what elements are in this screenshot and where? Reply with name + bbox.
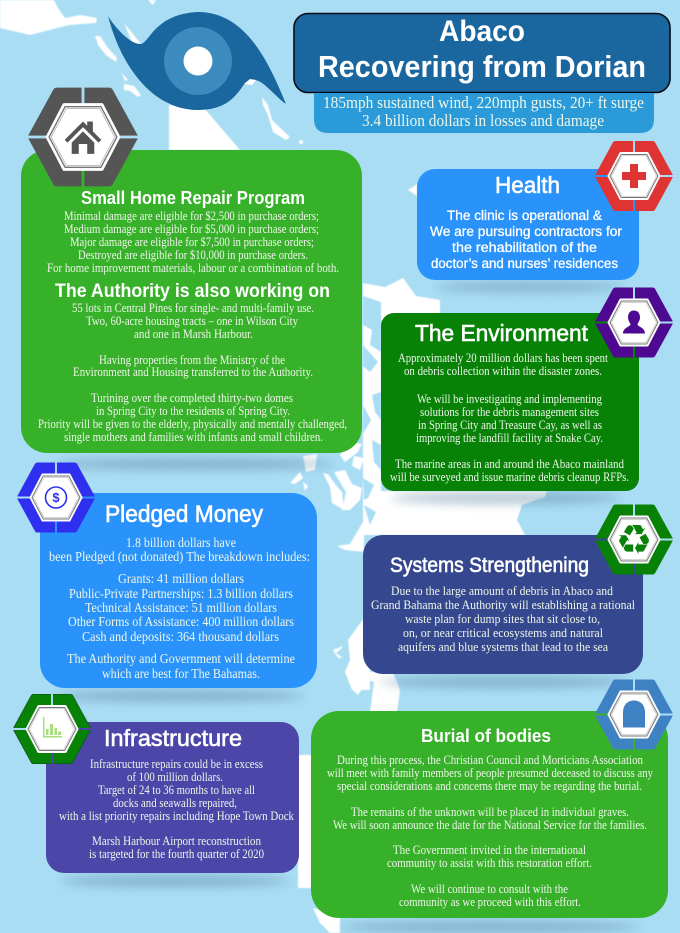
heading: the environment: The Environment <box>415 320 589 346</box>
icon: medical cross badge <box>598 144 670 208</box>
heading: small home repair program: Small Home Repair Program <box>81 188 305 208</box>
text block: burial: special considerations and concerns there may be regarding the burial. <box>337 779 642 793</box>
subtitle banner: 3.4 billion dollars in losses and damage <box>362 111 604 130</box>
text block: authority work <box>38 301 347 444</box>
panel: pledged money <box>40 493 317 688</box>
icon: recycling badge <box>598 508 670 572</box>
text block: burial: community as we proceed with this effort. <box>399 895 581 909</box>
text block: authority work: Priority will be given to the elderly, physically and mentally challenged, <box>38 417 347 431</box>
text block: environment: We will be investigating and implementing <box>417 392 602 406</box>
text block: pledged breakdown: Grants: 41 million dollars <box>118 571 244 586</box>
text block: pledged breakdown: been Pledged (not donated) The breakdown includes: <box>49 549 310 564</box>
text block: systems: aquifers and blue systems that lead to the sea <box>398 640 608 654</box>
text block: repair amounts: Destroyed are eligible for $10,000 in purchase orders. <box>78 248 308 262</box>
text block: pledged breakdown: The Authority and Government will determine <box>67 651 295 666</box>
subtitle banner: 185mph sustained wind, 220mph gusts, 20+ ft surge <box>323 93 644 112</box>
heading: pledged money: Pledged Money <box>105 501 263 528</box>
text block: systems <box>371 584 635 654</box>
text block: pledged breakdown: 1.8 billion dollars have <box>126 535 236 550</box>
text block: infrastructure: docks and seawalls repaired, <box>113 796 237 810</box>
text block: burial: The remains of the unknown will be placed in individual graves. <box>351 805 629 819</box>
title banner <box>294 14 670 92</box>
text block: health: We are pursuing contractors for <box>430 224 623 239</box>
text block: authority work: and one in Marsh Harbour. <box>134 327 253 341</box>
text block: burial: community to assist with this restoration effort. <box>387 856 592 870</box>
heading: infrastructure: Infrastructure <box>104 725 242 751</box>
text block: pledged breakdown: Other Forms of Assistance: 400 million dollars <box>68 614 294 629</box>
text block: environment: will be surveyed and issue marine debris cleanup RFPs. <box>390 470 629 484</box>
text block: health <box>430 208 623 271</box>
heading: health: Health <box>495 172 560 198</box>
text block: infrastructure: Marsh Harbour Airport reconstruction <box>92 834 261 848</box>
text block: environment: on debris collection within the disaster zones. <box>404 364 602 378</box>
panel: small home repair program <box>21 150 362 453</box>
panel: infrastructure <box>46 722 299 873</box>
text block: environment: in Spring City and Treasure Cay, as well as <box>418 418 602 432</box>
text block: pledged breakdown: Cash and deposits: 364 thousand dollars <box>82 629 279 644</box>
text block: infrastructure: Target of 24 to 36 months to have all <box>98 783 256 797</box>
title banner: Abaco <box>439 15 525 48</box>
panel: health <box>417 169 639 280</box>
panel: the environment <box>381 313 639 491</box>
heading: burial of bodies: Burial of bodies <box>421 726 551 746</box>
text block: systems: Due to the large amount of debris in Abaco and <box>391 584 614 598</box>
text block: repair amounts: Minimal damage are eligible for $2,500 in purchase orders; <box>64 209 319 223</box>
icon: dollar badge: $ <box>52 490 60 505</box>
text block: repair amounts <box>47 209 339 275</box>
heading: systems strengthening: Systems Strengthening <box>390 554 589 577</box>
subtitle banner <box>314 93 654 133</box>
text block: authority work: Two, 60-acre housing tracts – one in Wilson City <box>86 314 299 328</box>
text block: health: the rehabilitation of the <box>452 240 597 255</box>
text block: environment: Approximately 20 million dollars has been spent <box>398 351 609 365</box>
text block: health: doctor’s and nurses’ residences <box>431 256 618 271</box>
drop shadows beneath panels <box>55 282 640 933</box>
text block: authority work: Having properties from the Ministry of the <box>99 353 285 367</box>
text block: pledged breakdown: Public-Private Partnerships: 1.3 billion dollars <box>69 586 293 601</box>
text block: authority work: 55 lots in Central Pines for single- and multi-family use. <box>72 301 314 315</box>
icon: person badge <box>598 290 670 354</box>
panel: systems strengthening <box>363 535 643 674</box>
icon: house badge <box>32 92 134 182</box>
text block: authority work: in Spring City to the residents of Spring City. <box>96 404 290 418</box>
text block: authority work: single mothers and families with infants and small children. <box>64 430 323 444</box>
text block: environment <box>390 351 629 484</box>
text block: infrastructure: is targeted for the fourth quarter of 2020 <box>89 847 264 861</box>
panel: burial of bodies <box>311 711 668 918</box>
text block: infrastructure: with a list priority repairs including Hope Town Dock <box>59 809 295 823</box>
text block: burial: The Government invited in the international <box>393 843 587 857</box>
heading: the authority is also working on: The Authority is also working on <box>55 281 330 302</box>
text block: burial <box>327 753 654 909</box>
text block: burial: During this process, the Christian Council and Morticians Association <box>337 753 643 767</box>
text block: infrastructure: of 100 million dollars. <box>127 770 223 784</box>
text block: environment: improving the landfill facility at Snake Cay. <box>416 431 603 445</box>
text block: environment: solutions for the debris management sites <box>420 405 599 419</box>
text block: authority work: Environment and Housing transferred to the Authority. <box>73 365 313 379</box>
text block: infrastructure: Infrastructure repairs could be in excess <box>90 757 263 771</box>
text block: pledged breakdown: Technical Assistance: 51 million dollars <box>85 600 277 615</box>
text block: burial: We will continue to consult with the <box>411 882 568 896</box>
text block: authority work: Turining over the completed thirty-two domes <box>91 391 293 405</box>
icon: hurricane symbol <box>108 12 286 110</box>
text block: systems: Grand Bahama the Authority will establishing a rational <box>371 598 635 612</box>
icon: dollar badge <box>20 466 92 530</box>
icon: tombstone badge <box>598 682 670 746</box>
text block: environment: The marine areas in and around the Abaco mainland <box>395 457 624 471</box>
text block: repair amounts: Medium damage are eligible for $5,000 in purchase orders; <box>64 222 319 236</box>
text block: health: The clinic is operational & <box>447 208 602 223</box>
map lakes <box>363 296 381 525</box>
text block: pledged breakdown: which are best for The Bahamas. <box>102 666 260 681</box>
text block: repair amounts: Major damage are eligible for $7,500 in purchase orders; <box>70 235 314 249</box>
text block: systems: on, or near critical ecosystems and natural <box>403 626 603 640</box>
icon: recycling badge: ♻ <box>616 516 652 564</box>
text block: pledged breakdown <box>49 535 310 681</box>
title banner: Recovering from Dorian <box>318 49 646 84</box>
text block: infrastructure <box>59 757 295 861</box>
text block: systems: waste plan for dump sites that sit close to, <box>405 612 600 626</box>
text block: burial: We will soon announce the date for the National Service for the families. <box>333 818 647 832</box>
text block: repair amounts: For home improvement materials, labour or a combination of both. <box>47 261 339 275</box>
icon: bar chart badge <box>16 697 88 761</box>
